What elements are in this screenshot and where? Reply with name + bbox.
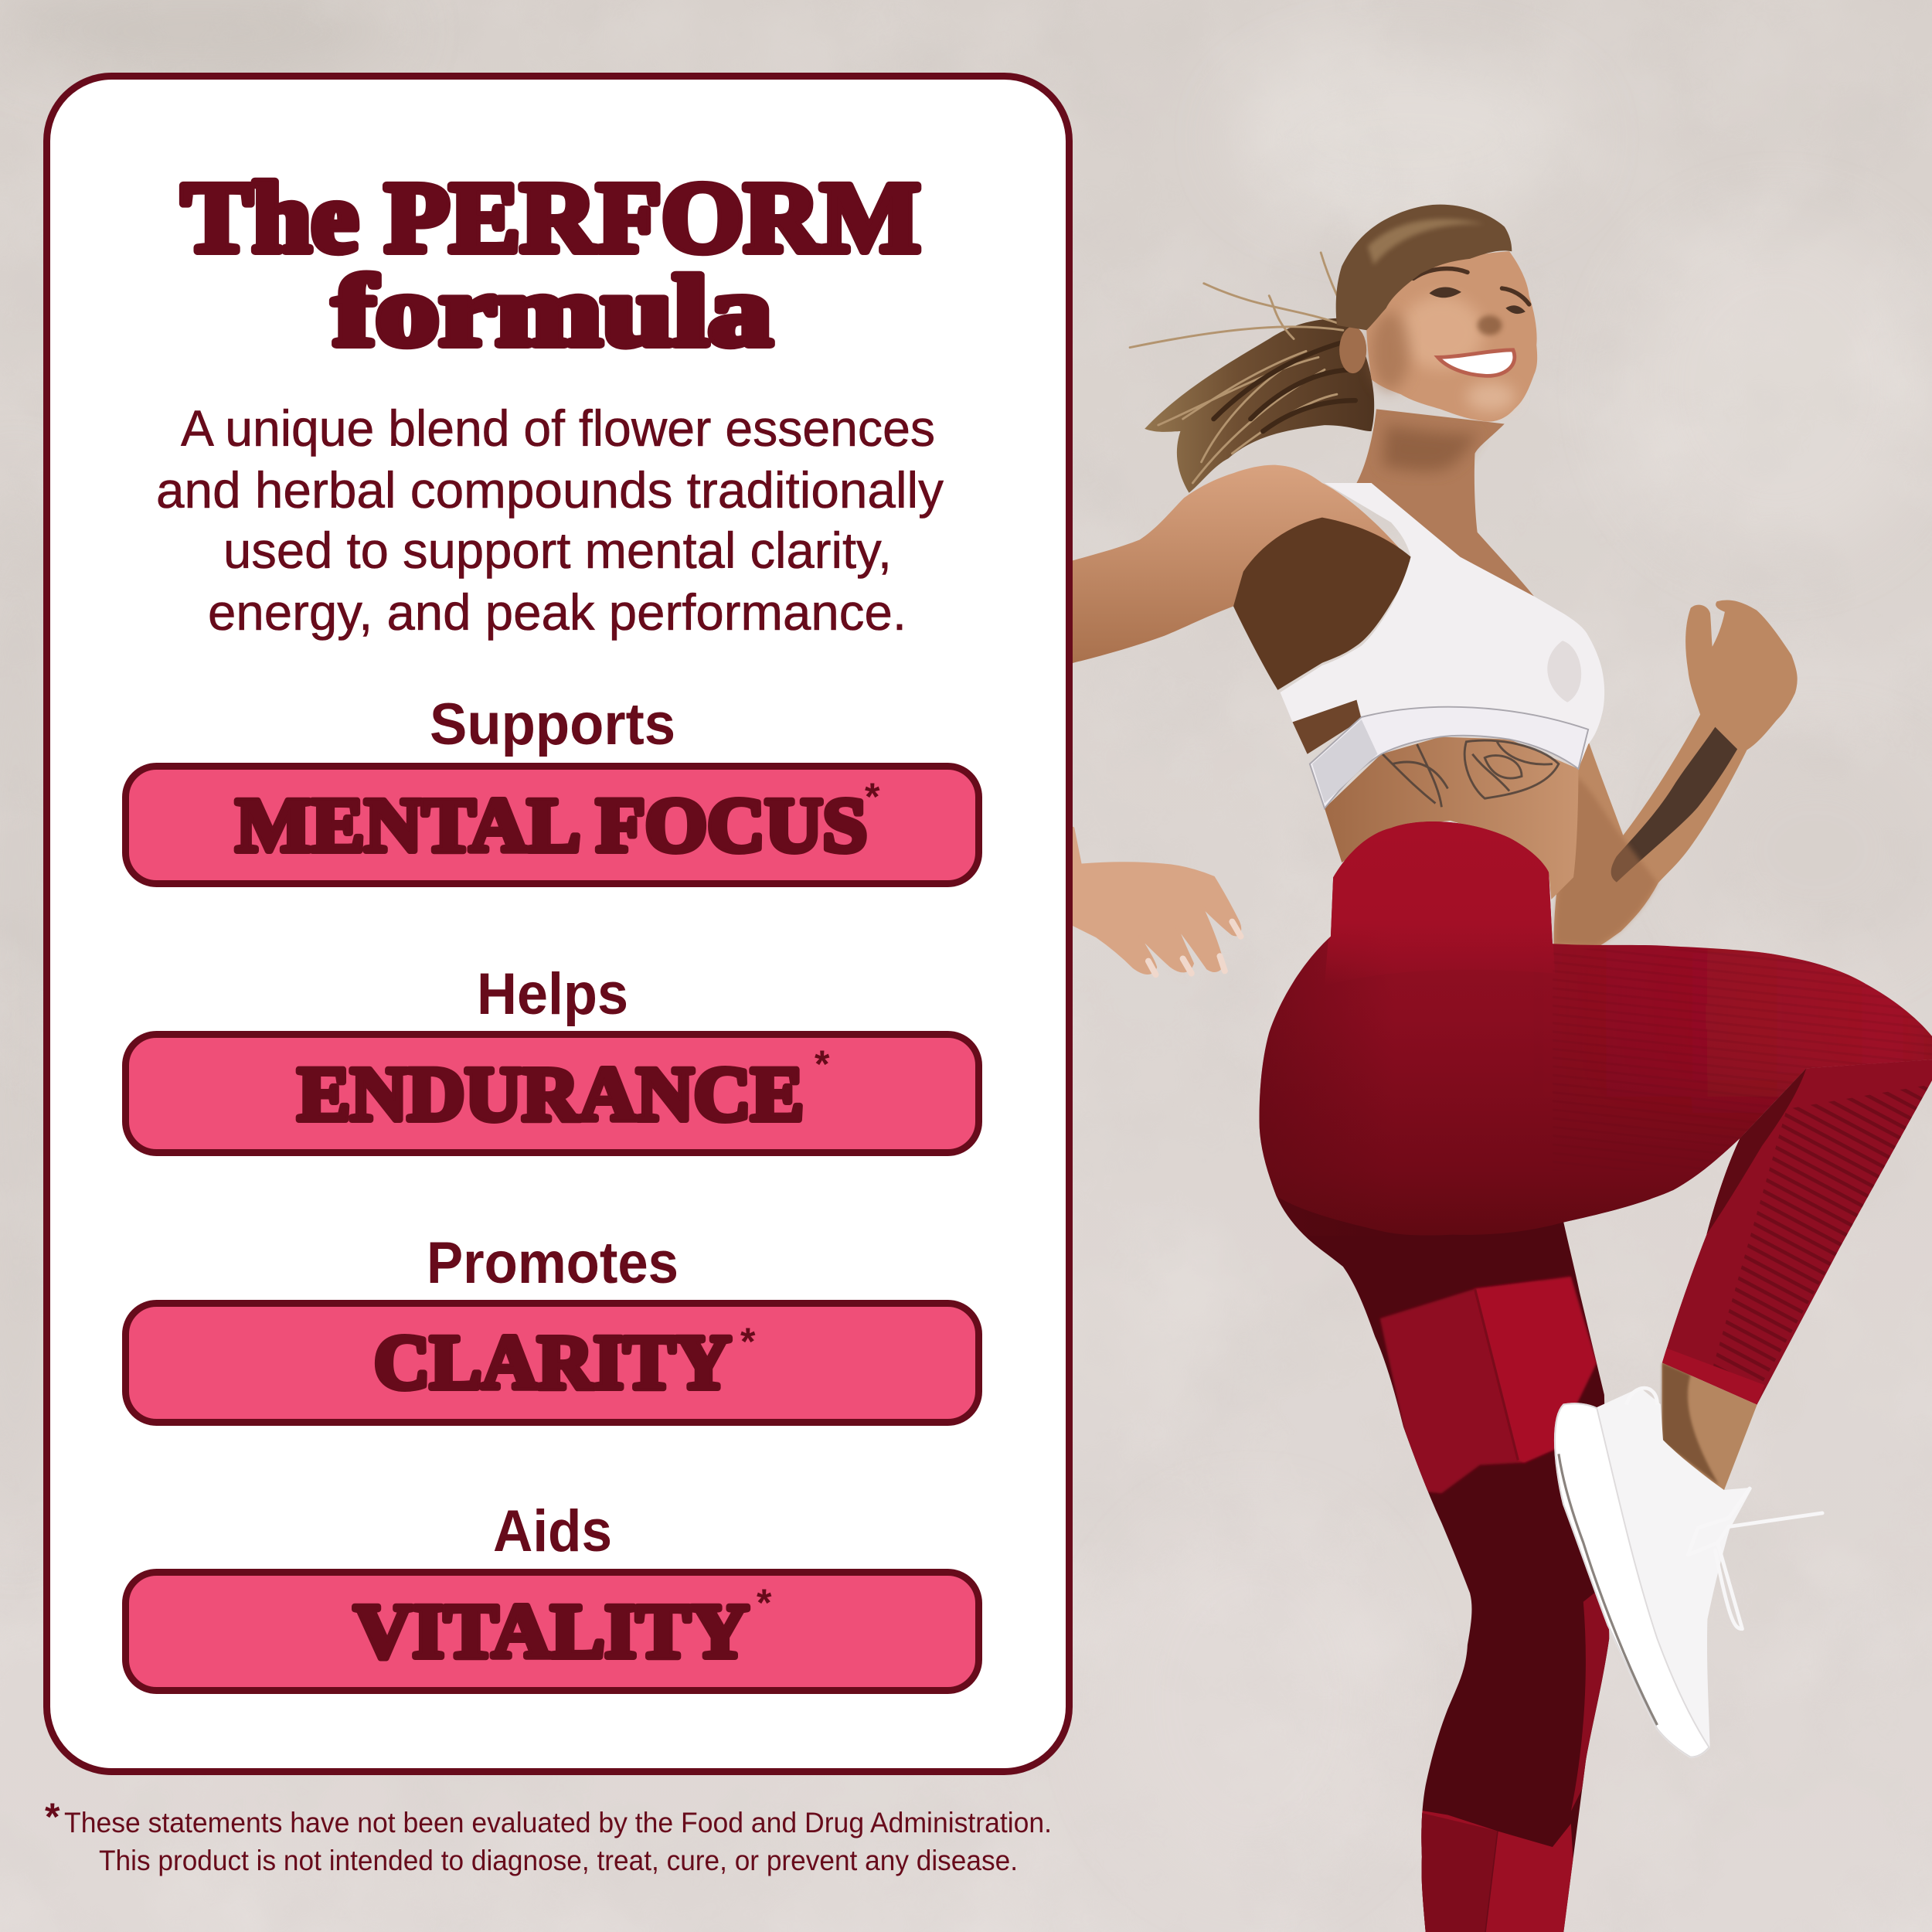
ponytail <box>1130 253 1374 493</box>
benefit: vitality <box>125 1498 978 1691</box>
benefit: clarity: CLARITY <box>374 1319 731 1405</box>
underarm shadow <box>1233 518 1411 690</box>
left arm <box>1060 465 1411 668</box>
face <box>1339 251 1537 422</box>
intro paragraph: and herbal compounds traditionally <box>156 461 944 519</box>
benefit: clarity: * <box>740 1320 756 1363</box>
red leggings <box>1232 801 1932 1932</box>
eyebrows <box>1413 269 1529 304</box>
benefit: endurance <box>125 961 978 1153</box>
waistband <box>1326 821 1554 971</box>
white sneaker with laces <box>1555 1388 1822 1757</box>
benefit: mental focus: MENTAL FOCUS <box>236 782 867 868</box>
title: The PERFORM <box>182 162 920 274</box>
thigh light and shade <box>1669 946 1932 1116</box>
photo: jumping woman in red leggings <box>1060 205 1932 1932</box>
footnote disclaimer: These statements have not been evaluated by the Food and Drug Administration. <box>64 1807 1052 1838</box>
benefit: clarity: Promotes <box>427 1230 679 1296</box>
intro paragraph: energy, and peak performance. <box>208 583 906 641</box>
standing leg base shadow <box>1232 1183 1651 1932</box>
title <box>182 162 920 367</box>
panel: formula card <box>46 76 1070 1771</box>
shin <box>1662 1060 1932 1405</box>
bare midriff with tattoo <box>1325 736 1578 900</box>
lit lower shin <box>1421 1811 1573 1932</box>
benefit: mental focus: * <box>865 775 880 818</box>
ear <box>1339 327 1366 373</box>
white sports bra <box>1281 483 1604 808</box>
eyes <box>1429 287 1526 314</box>
hair on top of head <box>1336 205 1512 330</box>
left hand <box>1060 828 1241 975</box>
neck and chest skin <box>1356 409 1534 597</box>
ankle <box>1662 1362 1757 1491</box>
right arm and hand <box>1555 601 1796 946</box>
benefit: mental focus <box>125 692 978 884</box>
footnote disclaimer <box>45 1795 1052 1876</box>
footnote disclaimer: * <box>45 1795 60 1838</box>
intro paragraph: A unique blend of flower essences <box>181 400 935 457</box>
standing leg left band and lit patch <box>1380 1281 1555 1493</box>
benefit: clarity <box>125 1230 978 1422</box>
intro paragraph: used to support mental clarity, <box>223 522 892 579</box>
benefit: vitality: Aids <box>493 1498 612 1564</box>
smile <box>1438 350 1515 376</box>
benefit: endurance: Helps <box>477 961 628 1027</box>
benefit: mental focus: Supports <box>430 692 675 757</box>
footnote disclaimer: This product is not intended to diagnose, treat, cure, or prevent any disease. <box>99 1845 1018 1876</box>
benefit: vitality: VITALITY <box>354 1588 749 1674</box>
benefit: vitality: * <box>757 1581 772 1624</box>
intro paragraph <box>156 400 944 641</box>
benefit: endurance: * <box>815 1043 830 1086</box>
raised thigh <box>1232 801 1932 1236</box>
title: formula <box>333 256 772 367</box>
benefit: endurance: ENDURANCE <box>298 1051 804 1137</box>
